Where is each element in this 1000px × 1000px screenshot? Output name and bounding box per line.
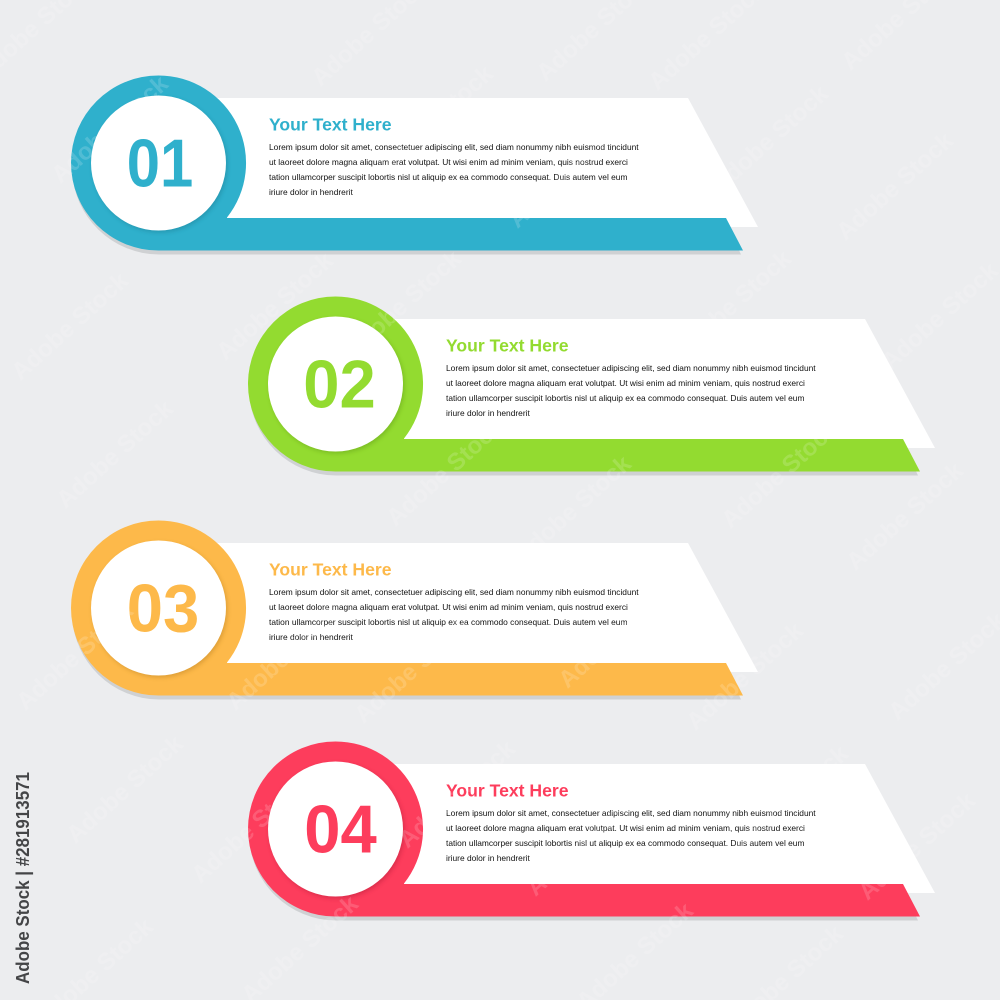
body text: Lorem ipsum dolor sit amet, consectetuer adipiscing elit, sed diam nonummy nibh euismod tincidunt — [269, 587, 639, 597]
watermark pattern: Adobe Stock — [186, 770, 314, 889]
drop shadow — [249, 391, 918, 476]
body text: tation ullamcorper suscipit lobortis nisl ut aliquip ex ea commodo consequat. Duis autem vel eum — [446, 838, 804, 848]
drop shadow — [249, 836, 918, 920]
drop shadow — [72, 170, 741, 254]
watermark pattern: Adobe Stock — [61, 730, 189, 849]
body text: iriure dolor in hendrerit — [269, 632, 353, 642]
panel: step 01 — [71, 75, 758, 254]
watermark pattern: Adobe Stock — [381, 413, 509, 532]
number: 01 — [127, 126, 193, 202]
white card — [200, 543, 758, 672]
watermark pattern: Adobe Stock — [853, 787, 981, 906]
watermark pattern: Adobe Stock — [339, 245, 467, 364]
panel: step 04 — [248, 742, 935, 920]
stock id label: Adobe Stock | #281913571 — [13, 772, 33, 984]
white card — [200, 98, 758, 227]
number circle — [268, 316, 403, 452]
watermark pattern: Adobe Stock — [6, 267, 134, 386]
number circle — [268, 762, 403, 896]
watermark pattern: Adobe Stock — [221, 597, 349, 716]
watermark pattern: Adobe Stock — [521, 783, 649, 902]
body text: ut laoreet dolore magna aliquam erat volutpat. Ut wisi enim ad minim veniam, quis nostrud exerci — [446, 378, 805, 388]
heading: Your Text Here — [446, 336, 569, 356]
watermark pattern: Adobe Stock — [51, 395, 179, 514]
colored ribbon and ring — [71, 520, 743, 696]
watermark pattern: Adobe Stock — [831, 127, 959, 246]
watermark pattern: Adobe Stock — [726, 740, 854, 859]
body text: Lorem ipsum dolor sit amet, consectetuer adipiscing elit, sed diam nonummy nibh euismod tincidunt — [446, 808, 816, 818]
watermark pattern: Adobe Stock — [11, 597, 139, 716]
number: 03 — [127, 570, 199, 646]
number circle — [91, 96, 226, 230]
body text: ut laoreet dolore magna aliquam erat volutpat. Ut wisi enim ad minim veniam, quis nostrud exerci — [446, 823, 805, 833]
body text: Lorem ipsum dolor sit amet, consectetuer adipiscing elit, sed diam nonummy nibh euismod tincidunt — [269, 142, 639, 152]
watermark pattern: Adobe Stock — [681, 617, 809, 736]
body text: iriure dolor in hendrerit — [446, 853, 530, 863]
circle shadow — [92, 542, 228, 678]
watermark pattern: Adobe Stock — [669, 245, 797, 364]
number circle — [91, 540, 226, 676]
heading: Your Text Here — [446, 780, 569, 800]
panel: step 02 — [248, 296, 935, 476]
watermark pattern: Adobe Stock — [211, 247, 339, 366]
white card — [377, 319, 935, 448]
number: 02 — [303, 346, 376, 422]
watermark pattern: Adobe Stock — [841, 457, 969, 576]
colored ribbon and ring — [248, 742, 920, 916]
circle shadow — [270, 318, 404, 454]
circle shadow — [92, 98, 228, 232]
number: 04 — [304, 792, 377, 868]
watermark pattern: Adobe Stock — [46, 70, 174, 189]
body text: ut laoreet dolore magna aliquam erat volutpat. Ut wisi enim ad minim veniam, quis nostrud exerci — [269, 602, 628, 612]
watermark pattern: Adobe Stock — [716, 415, 844, 534]
body text: tation ullamcorper suscipit lobortis nisl ut aliquip ex ea commodo consequat. Duis autem vel eum — [269, 617, 627, 627]
watermark pattern: Adobe Stock — [876, 257, 1000, 376]
body text: Lorem ipsum dolor sit amet, consectetuer adipiscing elit, sed diam nonummy nibh euismod tincidunt — [446, 363, 816, 373]
watermark pattern: Adobe Stock — [706, 80, 834, 199]
body text: ut laoreet dolore magna aliquam erat volutpat. Ut wisi enim ad minim veniam, quis nostrud exerci — [269, 157, 628, 167]
heading: Your Text Here — [269, 114, 392, 134]
body text: tation ullamcorper suscipit lobortis nisl ut aliquip ex ea commodo consequat. Duis autem vel eum — [269, 172, 627, 182]
body text: iriure dolor in hendrerit — [269, 187, 353, 197]
watermark pattern: Adobe Stock — [509, 450, 637, 569]
heading: Your Text Here — [269, 560, 392, 580]
watermark pattern: Adobe Stock — [503, 115, 631, 234]
body text: iriure dolor in hendrerit — [446, 408, 530, 418]
watermark pattern: Adobe Stock — [393, 735, 521, 854]
watermark pattern: Adobe Stock — [371, 60, 499, 179]
panel: step 03 — [71, 520, 758, 700]
watermark pattern: Adobe Stock — [553, 575, 681, 694]
colored ribbon and ring — [248, 296, 920, 472]
circle shadow — [270, 764, 404, 898]
watermark pattern: Adobe Stock — [349, 610, 477, 729]
drop shadow — [72, 615, 741, 700]
body text: tation ullamcorper suscipit lobortis nisl ut aliquip ex ea commodo consequat. Duis autem vel eum — [446, 393, 804, 403]
colored ribbon and ring — [71, 75, 743, 250]
white card — [377, 764, 935, 893]
